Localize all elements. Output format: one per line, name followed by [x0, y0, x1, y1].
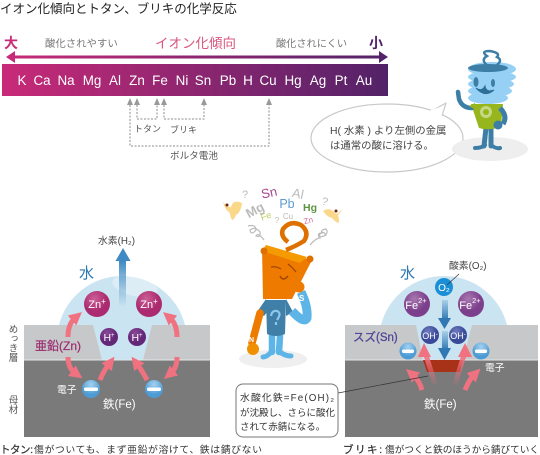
ion: H+ right: H: [131, 332, 139, 344]
base material: iron: [24, 360, 210, 437]
metal series bar: Hg: [284, 73, 302, 88]
label: zinc: 亜鉛(Zn): [35, 339, 81, 353]
leader line: oxygen: [447, 274, 459, 285]
metal series bar: Fe: [152, 73, 168, 88]
metal series bar: Pt: [335, 73, 348, 88]
ion: Fe2+ left: 2+: [418, 296, 427, 305]
label: electron: 電子: [57, 384, 77, 396]
arrow: hydrogen up: [116, 248, 130, 307]
bracket arrowheads: [127, 98, 272, 105]
floating metal symbols: Zn: [303, 215, 314, 226]
ion: OH- left: OH: [422, 331, 436, 341]
rising arrow right: [455, 343, 472, 384]
label: oxidizes easily: 酸化されやすい: [45, 37, 118, 50]
icon: dizzy swirl left: [248, 226, 264, 240]
base material: iron: [345, 360, 538, 437]
ion: Zn+ left: Zn: [88, 299, 101, 311]
label: small: 小: [369, 35, 383, 51]
label: iron: 鉄(Fe): [424, 397, 457, 411]
plating layer: tin: [345, 325, 538, 360]
title: イオン化傾向とトタン、ブリキの化学反応: [0, 1, 237, 16]
metal series bar: [2, 64, 388, 96]
label: hard to oxidize: 酸化されにくい: [276, 37, 347, 50]
label: buriki: ブリキ: [170, 124, 197, 135]
diagram: totan: [6, 234, 210, 437]
callout: hydrogen note: H( 水素 ) より左側の金属: [330, 124, 446, 137]
rust: [423, 360, 463, 372]
side arrows: [413, 375, 474, 390]
floating metal symbols: Hg: [303, 202, 317, 214]
metal series bar: K: [18, 73, 27, 88]
metal series bar: Au: [356, 73, 372, 88]
ion: Zn+ right: Zn: [140, 299, 153, 311]
floating metal symbols: ?: [320, 196, 329, 209]
rising arrow left: [418, 343, 435, 384]
water dome: [381, 276, 507, 360]
character: orange thinking mascot: N: [249, 337, 254, 344]
dome highlight: [110, 271, 160, 301]
plating layer: zinc: [24, 325, 210, 360]
ion: Zn+ left: [84, 291, 110, 317]
floating metal symbols: ?: [242, 189, 248, 201]
metal series bar: Sn: [195, 73, 211, 88]
water dome: [59, 276, 185, 360]
floating metal symbols: Sn: [260, 184, 278, 202]
ion: Fe2+ right: Fe: [459, 300, 472, 312]
ion: O2: O₂: [438, 283, 450, 294]
floating metal symbols: [242, 184, 329, 226]
ion: OH- right: OH: [450, 331, 464, 341]
metal series bar: Mg: [83, 73, 101, 88]
metal series bar: Pb: [220, 73, 236, 88]
metal series bar: Na: [57, 73, 75, 88]
callout: iron hydroxide: [236, 384, 338, 437]
ion: OH- right: -: [464, 332, 466, 338]
ion: H+ right: [128, 328, 146, 346]
metal series bar: Ni: [176, 73, 188, 88]
arrow: oxygen down lower: [438, 331, 451, 360]
metal series bar: Ca: [33, 73, 51, 88]
ion: H+ left: H: [103, 332, 111, 344]
ion: Zn+ right: [136, 291, 162, 317]
ion: H+ left: +: [111, 333, 115, 339]
floating metal symbols: ?: [275, 216, 280, 225]
callout: iron hydroxide: 水酸化鉄=Fe(OH)₂: [240, 391, 334, 404]
label: base material: 母材: [6, 395, 18, 414]
metal series bar: Zn: [129, 73, 145, 88]
electron right: [145, 380, 163, 398]
ion: OH- right: [449, 326, 467, 344]
heading: ionization tendency: イオン化傾向: [155, 36, 236, 51]
label: large: 大: [4, 35, 18, 51]
label: oxygen: 酸素(O₂): [449, 259, 487, 272]
label: iron: 鉄(Fe): [103, 397, 136, 411]
panel: ionization series: [2, 35, 388, 162]
ion: O2: [435, 278, 453, 296]
character: blue screw mascot: [452, 51, 528, 161]
ion: H+ left: [100, 328, 118, 346]
character: orange thinking mascot: [239, 223, 314, 368]
ion: Fe2+ left: Fe: [405, 300, 418, 312]
ion: OH- left: [421, 326, 439, 344]
arrow: oxygen down upper: [438, 300, 451, 329]
label: electron: 電子: [485, 362, 505, 374]
label: water: 水: [79, 265, 94, 282]
caption: buriki: [343, 443, 539, 455]
metal series bar: Cu: [259, 73, 277, 88]
metal series bar: Al: [109, 73, 121, 88]
ion: Fe2+ left: [404, 291, 430, 317]
floating metal symbols: Al: [291, 185, 305, 202]
icon: yellow bird right: [323, 209, 342, 223]
diagram: buriki: [345, 259, 538, 437]
electron right: [472, 342, 490, 360]
double arrow: [6, 51, 388, 63]
label: tin: スズ(Sn): [353, 330, 398, 344]
ion: Zn+ right: +: [153, 297, 158, 306]
floating metal symbols: Cu: [283, 212, 293, 221]
ion: H+ right: +: [139, 333, 143, 339]
floating metal symbols: Fe: [259, 210, 273, 223]
metal series bar: H: [243, 73, 253, 88]
ion: Zn+ left: +: [101, 297, 106, 306]
label: totan: トタン: [134, 124, 161, 134]
ion arrows: [68, 318, 177, 380]
floating metal symbols: Pb: [279, 197, 295, 211]
metal series bar: Ag: [310, 73, 326, 88]
ion: Fe2+ right: [458, 291, 484, 317]
label: plating layer: めっき層: [6, 324, 18, 363]
callout: hydrogen note: [311, 103, 463, 172]
reaction pair brackets: [130, 105, 269, 146]
callout: iron hydroxide: されて赤錆になる。: [240, 421, 325, 433]
label: hydrogen: 水素(H₂): [98, 234, 135, 247]
character: orange thinking mascot: S: [299, 294, 305, 303]
electron left: [82, 380, 100, 398]
leader line: rust: [338, 376, 428, 393]
callout: hydrogen note: は通常の酸に溶ける。: [330, 139, 434, 152]
label: volta cell: ボルタ電池: [170, 150, 218, 162]
floating metal symbols: Mg: [243, 199, 267, 221]
icon: dizzy swirl right: [310, 229, 327, 245]
label: water: 水: [400, 265, 415, 282]
ion: OH- left: -: [436, 332, 438, 338]
callout: iron hydroxide: が沈殿し、さらに酸化: [240, 407, 335, 419]
electron left: [400, 342, 416, 360]
ion: Fe2+ right: 2+: [472, 296, 481, 305]
icon: yellow bird left: [223, 202, 242, 220]
